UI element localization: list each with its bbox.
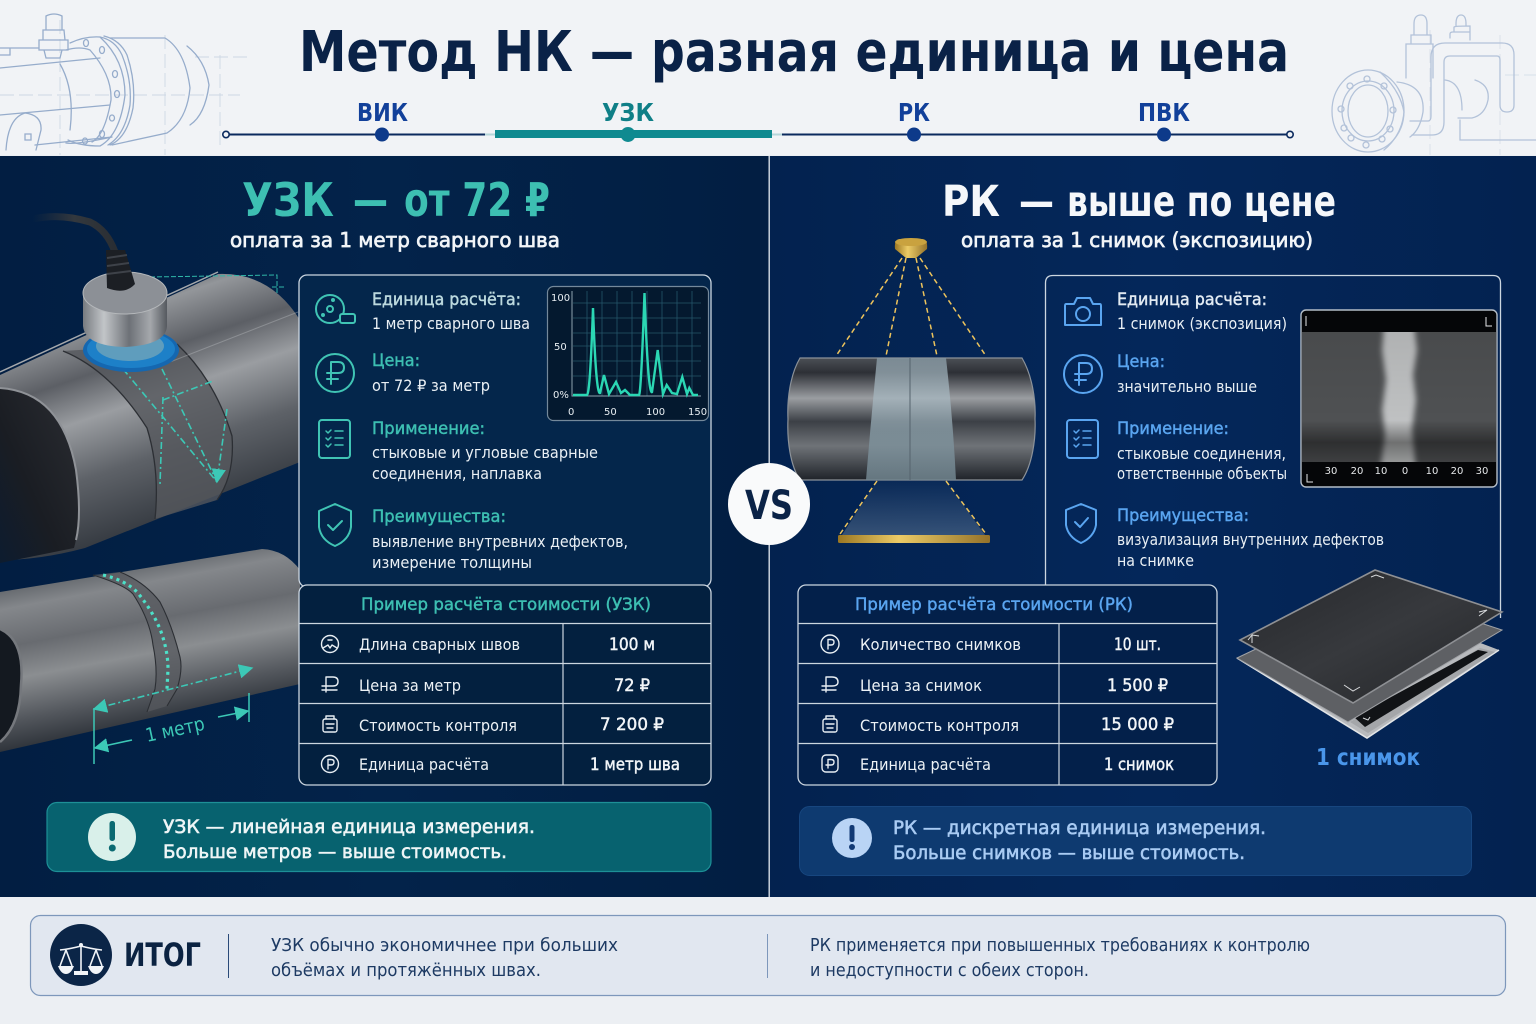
table row: unit <box>322 755 680 775</box>
text: advantages РК: визуализация внутренних дефектов <box>1117 530 1384 549</box>
VS badge: VS <box>745 483 793 529</box>
summary text: УЗК: объёмах и протяжённых швах. <box>271 960 541 981</box>
callout: РК discrete unit: Больше снимков — выше стоимость. <box>893 842 1245 864</box>
text: advantages УЗК: выявление внутревних дефектов, <box>372 532 628 551</box>
title: — <box>590 20 634 85</box>
chart: ultrasonic A-scan: 50 <box>554 342 567 353</box>
heading: УЗК price: от 72 ₽ <box>404 173 550 227</box>
radiograph image <box>1301 310 1497 487</box>
heading: РК price <box>942 177 1336 227</box>
icon: scales <box>50 924 112 986</box>
heading: УЗК price: УЗК <box>242 173 334 227</box>
text: price УЗК: от 72 ₽ за метр <box>372 376 490 395</box>
radiograph image: 10 <box>1426 466 1438 477</box>
icon: checklist <box>319 420 350 458</box>
text: application РК: ответственные объекты <box>1117 464 1287 483</box>
text: unit УЗК: 1 метр сварного шва <box>372 314 530 333</box>
text: advantages РК: на снимке <box>1117 551 1194 570</box>
text: application УЗК: соединения, наплавка <box>372 464 542 483</box>
chart: ultrasonic A-scan: 0% <box>553 390 569 401</box>
text: unit РК: 1 снимок (экспозиция) <box>1117 314 1287 333</box>
table row: price per shot: Цена за снимок <box>860 676 982 695</box>
table row: inspection cost: 15 000 ₽ <box>1101 715 1174 735</box>
method navigation timeline: УЗК <box>602 98 654 127</box>
radiograph image: 10 <box>1375 466 1387 477</box>
blueprint: pipe with flange, left <box>0 14 250 155</box>
method navigation timeline: ПВК <box>1138 98 1190 127</box>
panel: summary <box>30 916 1506 996</box>
table row: unit: Единица расчёта <box>359 755 489 774</box>
text: advantages УЗК: Преимущества: <box>372 507 506 527</box>
text: price РК: значительно выше <box>1117 377 1257 396</box>
text: application РК <box>1117 419 1287 483</box>
radiograph image: 20 <box>1351 466 1363 477</box>
callout: РК discrete unit <box>800 806 1472 876</box>
table row: inspection cost: 7 200 ₽ <box>600 715 664 735</box>
table row: inspection cost: Стоимость контроля <box>860 716 1019 735</box>
table: РК cost example: Пример расчёта стоимости (РК) <box>855 595 1133 615</box>
title: Метод НК <box>299 20 573 85</box>
illustration: pipe with one metre of weld: 1 метр <box>143 713 207 747</box>
text: price УЗК: Цена: <box>372 351 420 371</box>
icon: ruble <box>316 354 354 392</box>
icon: camera <box>1065 298 1101 325</box>
chart: ultrasonic A-scan: 150 <box>688 407 707 418</box>
table row: weld length <box>322 635 655 655</box>
heading: УЗК price <box>242 173 550 227</box>
text: application РК: Применение: <box>1117 419 1229 439</box>
method navigation timeline: РК <box>898 98 930 127</box>
table row: number of shots <box>821 635 1161 655</box>
table row: inspection cost <box>323 715 664 735</box>
text: application УЗК: Применение: <box>372 419 485 439</box>
callout: УЗК linear unit <box>47 802 711 872</box>
text: price РК: Цена: <box>1117 352 1165 372</box>
icon: shield <box>1066 504 1096 543</box>
icon: ruble <box>1064 355 1102 393</box>
summary label: ИТОГ <box>124 936 201 974</box>
table row: price per metre <box>322 676 650 696</box>
radiograph image: 30 <box>1476 466 1488 477</box>
footer background <box>0 897 1536 1024</box>
heading: УЗК price: — <box>353 173 388 227</box>
illustration: pipe with one metre of weld <box>0 549 300 764</box>
text: price УЗК <box>372 351 490 395</box>
subheading: РК unit: оплата за 1 снимок (экспозицию) <box>961 228 1313 252</box>
table row: price per shot: 1 500 ₽ <box>1107 676 1168 696</box>
table: УЗК cost example <box>299 585 711 785</box>
text: application УЗК: стыковые и угловые сварные <box>372 443 598 462</box>
table row: unit: 1 метр шва <box>590 755 680 775</box>
header background <box>0 0 1536 155</box>
panel: УЗК background <box>0 156 769 897</box>
table row: unit: Единица расчёта <box>860 755 991 774</box>
label: 1 shot: 1 снимок <box>1316 745 1420 771</box>
radiograph image: 0 <box>1402 466 1408 477</box>
icon: shield <box>319 504 351 546</box>
text: advantages РК <box>1117 506 1384 570</box>
chart: ultrasonic A-scan: 100 <box>646 407 665 418</box>
text: unit УЗК: Единица расчёта: <box>372 290 521 310</box>
heading: РК price: выше по цене <box>1067 177 1336 227</box>
callout: УЗК linear unit: Больше метров — выше стоимость. <box>163 841 507 863</box>
summary text: РК <box>810 935 1310 981</box>
table row: inspection cost <box>823 715 1174 735</box>
illustration: stack of film sheets <box>1237 570 1502 738</box>
chart: ultrasonic A-scan <box>548 286 708 420</box>
text: unit УЗК <box>372 290 530 333</box>
text: application УЗК <box>372 419 598 483</box>
callout: РК discrete unit: РК — дискретная единица измерения. <box>893 817 1266 839</box>
table row: price per metre: 72 ₽ <box>614 676 650 696</box>
text: application РК: стыковые соединения, <box>1117 444 1286 463</box>
summary text: РК: и недоступности с обеих сторон. <box>810 960 1089 981</box>
summary text: РК: РК применяется при повышенных требованиях к контролю <box>810 935 1310 956</box>
illustration: ultrasonic probe on pipe <box>0 217 300 563</box>
radiograph image: 30 <box>1325 466 1337 477</box>
table row: unit <box>822 755 1174 775</box>
table row: weld length: 100 м <box>609 635 655 655</box>
text: advantages УЗК <box>372 507 628 572</box>
panel: УЗК details <box>299 275 711 587</box>
chart: ultrasonic A-scan: 50 <box>604 407 617 418</box>
summary text: УЗК <box>271 935 618 981</box>
icon: checklist <box>1067 420 1098 458</box>
chart: ultrasonic A-scan: 100 <box>551 293 570 304</box>
text: unit РК: Единица расчёта: <box>1117 290 1267 310</box>
illustration: radiography of pipe <box>788 238 1035 543</box>
summary text: УЗК: УЗК обычно экономичнее при больших <box>271 935 618 956</box>
chart: ultrasonic A-scan: 0 <box>568 407 574 418</box>
method navigation timeline: ВИК <box>357 98 408 127</box>
text: advantages УЗК: измерение толщины <box>372 553 532 572</box>
icon: weld unit <box>316 295 355 323</box>
icon: exclamation <box>832 818 872 858</box>
blueprint: valve with piping, right <box>1332 15 1536 155</box>
table row: inspection cost: Стоимость контроля <box>359 716 517 735</box>
table row: number of shots: 10 шт. <box>1114 635 1161 655</box>
table: УЗК cost example: Пример расчёта стоимости (УЗК) <box>361 595 651 615</box>
table row: price per metre: Цена за метр <box>359 676 461 695</box>
text: unit РК <box>1117 290 1287 333</box>
panel: РК details <box>1046 276 1500 618</box>
text: price РК <box>1117 352 1257 396</box>
table row: unit: 1 снимок <box>1104 755 1174 775</box>
icon: exclamation <box>88 813 136 861</box>
heading: РК price: — <box>1019 177 1054 227</box>
method navigation timeline <box>223 98 1293 142</box>
table row: price per shot <box>822 676 1168 696</box>
text: advantages РК: Преимущества: <box>1117 506 1249 526</box>
table row: weld length: Длина сварных швов <box>359 635 520 654</box>
table: РК cost example <box>798 585 1217 785</box>
title <box>299 20 1289 85</box>
table row: number of shots: Количество снимков <box>860 635 1021 654</box>
subheading: УЗК unit: оплата за 1 метр сварного шва <box>230 228 560 252</box>
heading: РК price: РК <box>942 177 1000 227</box>
panel: РК background <box>769 156 1536 897</box>
title: разная единица и цена <box>651 20 1289 85</box>
radiograph image: 20 <box>1451 466 1463 477</box>
VS badge <box>728 463 810 545</box>
callout: УЗК linear unit: УЗК — линейная единица измерения. <box>163 816 535 838</box>
